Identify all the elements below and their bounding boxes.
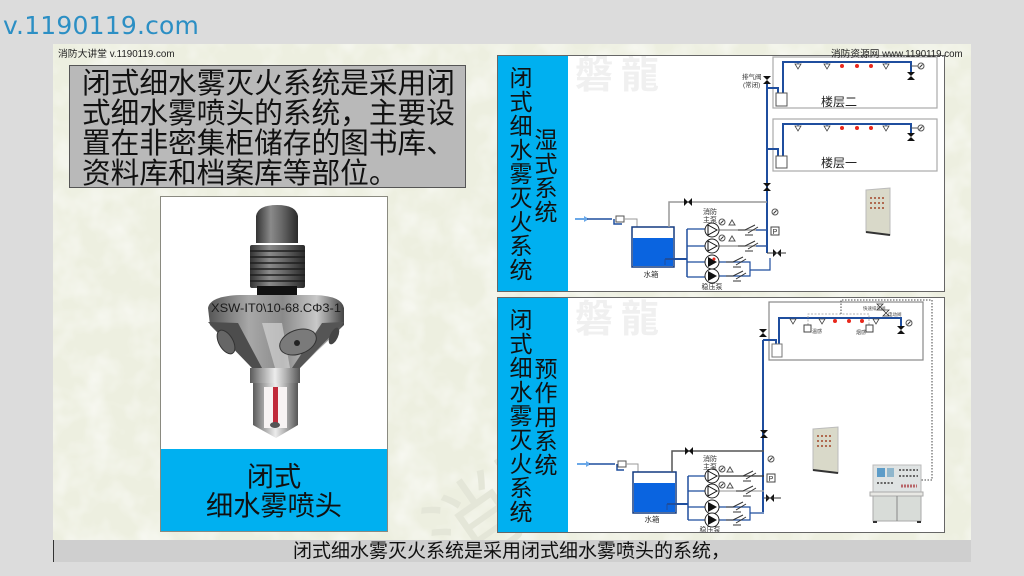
text box: system description [69,65,466,188]
text box: system description: 式细水雾喷头的系统，主要设 [82,98,455,130]
protected room: 电动阀 [888,311,902,318]
text box: system description: 闭式细水雾灭火系统是采用闭 [82,68,455,100]
text box: system description: 置在非密集柜储存的图书库、 [82,128,455,160]
panel: wet system [497,55,945,292]
panel: nozzle photo [160,196,388,532]
protected room: 温感 [812,328,822,335]
wet system blue label [498,56,568,291]
water tank and inlet [575,198,767,279]
subtitle bar: 闭式细水雾灭火系统是采用闭式细水雾喷头的系统， [293,541,730,562]
floor two room: 楼层二 [821,94,857,109]
pump group [687,207,770,291]
source label right: 消防资源网 www.1190119.com [831,49,963,60]
pump group: 稳压泵 [702,282,722,291]
pump group [688,454,764,534]
pump group: 主泵 [703,215,717,224]
control cabinet [866,188,890,235]
icon: closed water mist nozzle [208,205,344,438]
pre-action blue label [498,298,568,532]
wet system diagram [575,55,938,291]
panel: pre-action system [497,297,945,533]
main riser with vent valve: (常闭) [743,80,760,89]
main riser: P [769,476,774,483]
pre-action diagram [575,299,932,533]
control console [870,465,923,522]
pump group: 主泵 [703,462,717,471]
text box: system description: 资料库和档案库等部位。 [82,158,398,190]
pre-action title column: 闭式细水雾灭火系统 [510,307,532,525]
protected room [763,302,923,360]
floor one room [767,119,937,171]
site url header: v.1190119.com [3,11,199,40]
nozzle caption: 闭式 [247,461,301,492]
nozzle caption [161,449,387,531]
main riser with vent valve: 排气阀 [742,72,762,81]
water tank and inlet: 水箱 [644,269,659,279]
protected room: 烟感 [856,329,866,336]
protected room: 快速排气阀 [863,305,886,312]
floor one room: 楼层一 [821,155,857,170]
floor two room [767,57,937,109]
nozzle caption: 细水雾喷头 [206,490,342,521]
water tank and inlet: 水箱 [644,514,660,524]
control cabinet [813,427,838,473]
pump group: 消防 [703,207,717,216]
main riser [759,329,781,512]
main riser with vent valve [742,72,786,257]
watermark: 磐龍 [575,55,667,97]
pump group: 消防 [703,454,717,463]
wet system title column: 闭式细水雾灭火系统 [510,65,532,283]
pre-action subtitle column: 预作用系统 [534,356,558,478]
icon: closed water mist nozzle: XSW-IT0\10-68.CΦ3-1 [211,301,341,315]
subtitle bar [53,540,971,562]
source label left: 消防大讲堂 v.1190119.com [58,49,175,60]
dotted signal line [841,300,932,480]
wet system subtitle column: 湿式系统 [534,127,558,225]
water tank and inlet [577,447,764,524]
watermark: 磐龍 [575,299,667,341]
main riser with vent valve: P [773,229,778,236]
